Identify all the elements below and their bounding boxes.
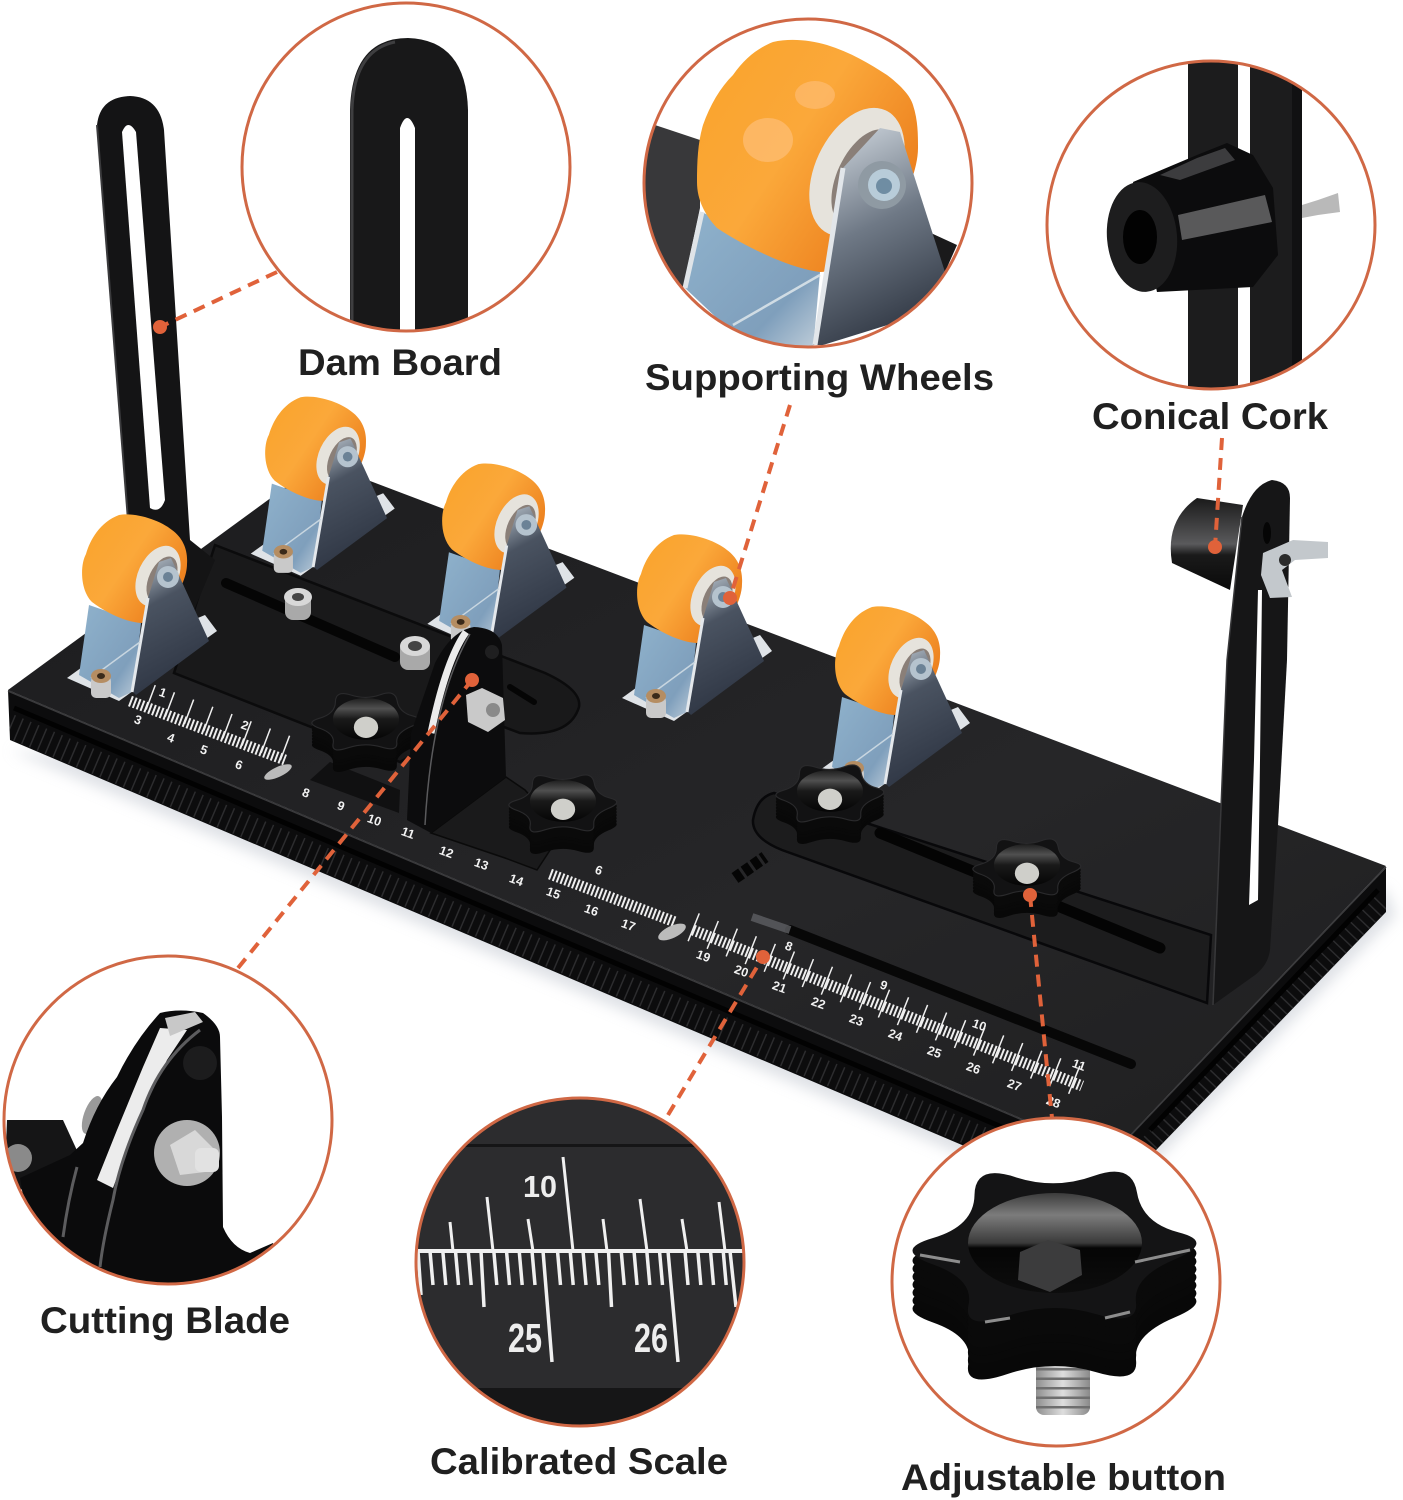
wheel 3 — [427, 463, 574, 646]
scale markings: 4 — [165, 730, 177, 746]
callout: calibrated scale — [410, 1098, 750, 1438]
dam board plate — [97, 96, 215, 620]
label: Supporting Wheels: Supporting Wheels — [645, 357, 994, 398]
long slot — [752, 917, 1131, 1064]
scale markings: 26 — [964, 1059, 982, 1077]
right slider plate — [735, 793, 1211, 1003]
callout: adjustable button — [892, 1118, 1220, 1446]
scale markings: 25 — [925, 1043, 943, 1061]
callout: supporting wheels — [640, 19, 972, 350]
product: bottle cutter board — [8, 96, 1396, 1215]
scale markings: 15 — [544, 884, 562, 902]
scale markings — [130, 685, 1088, 1111]
scale markings: 3 — [132, 712, 144, 728]
scale markings: 1 — [157, 685, 168, 701]
left slider plate — [174, 545, 579, 762]
leader: supporting wheels — [723, 405, 790, 605]
board base — [8, 462, 1396, 1215]
scale markings: 20 — [732, 962, 750, 980]
wheel 2 — [251, 397, 395, 576]
scale markings: 24 — [886, 1026, 904, 1044]
knob 3 — [776, 765, 884, 844]
callout: calibrated scale: 10 — [523, 1169, 557, 1204]
scale markings: 6 — [593, 863, 605, 878]
scale markings: 22 — [809, 994, 827, 1012]
wheel 5 — [820, 606, 970, 793]
scale markings: 2 — [239, 718, 251, 733]
scale markings: 10 — [970, 1016, 988, 1034]
scale markings: 8 — [783, 939, 795, 954]
scale markings: 6 — [233, 757, 245, 773]
callout: conical cork — [1047, 50, 1375, 400]
scale markings: 14 — [507, 871, 525, 889]
scale markings: 11 — [1070, 1056, 1088, 1074]
knob 1 — [312, 693, 420, 772]
scale markings: 28 — [1044, 1093, 1062, 1111]
scale markings: 17 — [619, 916, 637, 934]
scale markings: 11 — [399, 824, 417, 842]
wheel 4 — [622, 534, 772, 721]
scale markings: 27 — [1005, 1076, 1023, 1094]
wheel 1 — [67, 514, 217, 701]
scale markings: 9 — [335, 798, 347, 814]
leader: adjustable button — [1023, 888, 1052, 1118]
slider bolts — [284, 588, 430, 670]
callout: calibrated scale: 25 — [508, 1315, 542, 1361]
leader: cutting blade — [238, 673, 479, 968]
scale markings: 10 — [365, 811, 383, 829]
leader: calibrated scale — [668, 950, 770, 1115]
callout: cutting blade — [4, 956, 332, 1300]
knob 4 — [973, 839, 1081, 918]
small blade foot plate — [310, 762, 562, 870]
label: Cutting Blade: Cutting Blade — [40, 1300, 290, 1341]
knob 2 — [509, 775, 617, 854]
label: Calibrated Scale: Calibrated Scale — [430, 1441, 728, 1482]
scale markings: 12 — [437, 843, 455, 861]
label: Dam Board: Dam Board — [298, 342, 502, 383]
label: Conical Cork: Conical Cork — [1092, 396, 1328, 437]
scale markings: 23 — [847, 1011, 865, 1029]
leader: conical cork — [1208, 438, 1222, 554]
callout: calibrated scale: 26 — [634, 1315, 668, 1361]
scale markings: 9 — [878, 978, 890, 993]
scale markings: 8 — [300, 785, 312, 801]
leader: dam board — [153, 272, 277, 334]
callout: dam board — [242, 3, 570, 340]
scale markings: 5 — [198, 742, 210, 758]
scale markings: 19 — [694, 947, 712, 965]
label: Adjustable button: Adjustable button — [901, 1457, 1226, 1498]
scale markings: 21 — [770, 978, 788, 996]
scale markings: 13 — [472, 855, 490, 873]
scale markings: 16 — [582, 901, 600, 919]
cutting blade assembly — [407, 627, 506, 833]
right stand with conical cork — [1171, 480, 1328, 1005]
